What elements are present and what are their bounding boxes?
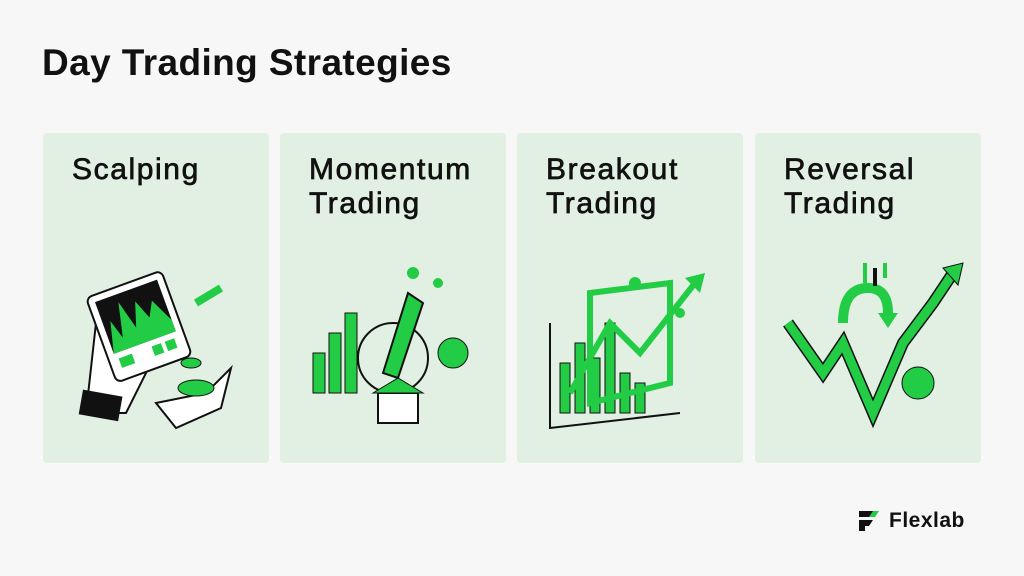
panel: scalping: Scalping: [72, 153, 200, 186]
panel: reversal trading: Reversal: [784, 153, 915, 186]
panel: reversal trading: [755, 133, 981, 463]
logo: flexlab: Flexlab: [889, 509, 965, 532]
panel: breakout trading: Breakout: [546, 153, 679, 186]
icon: reversal zigzag: [783, 262, 964, 428]
panel: momentum trading: Trading: [309, 187, 421, 220]
panel: momentum trading: [280, 133, 506, 463]
panel: breakout trading: Trading: [546, 187, 658, 220]
panel: breakout trading: [517, 133, 743, 463]
title: Day Trading Strategies: [42, 42, 452, 83]
icon: tablet in hands: [78, 271, 233, 430]
panel: momentum trading: Momentum: [309, 153, 472, 186]
icon: rocket and bars: [312, 267, 468, 424]
panel: scalping: [43, 133, 269, 463]
icon: breakout chart: [549, 273, 705, 430]
panel: reversal trading: Trading: [784, 187, 896, 220]
